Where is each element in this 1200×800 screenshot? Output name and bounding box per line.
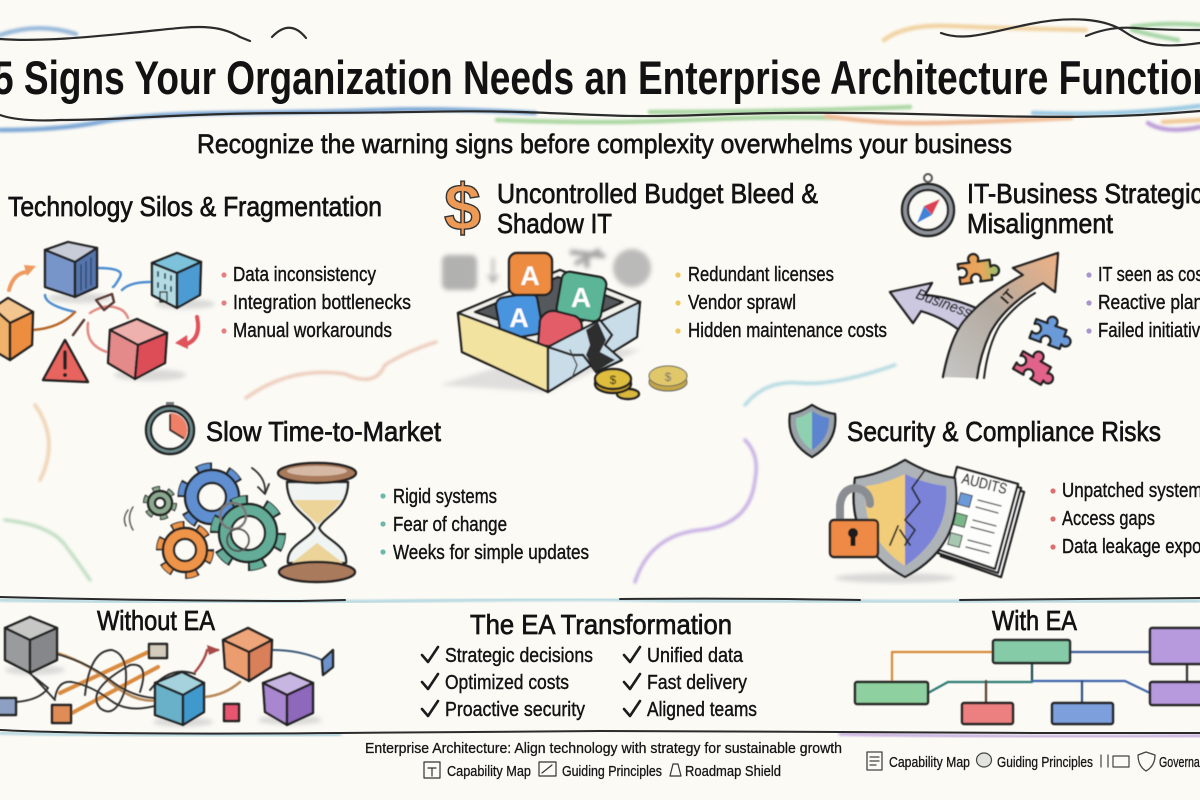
bullet list: security and compliance: Access gaps xyxy=(1062,508,1155,530)
orange gear xyxy=(161,526,209,574)
heading: with EA: With EA xyxy=(992,605,1077,636)
heading: slow time-to-market: Slow Time-to-Market xyxy=(206,416,441,447)
bullet list: technology silos: Data inconsistency xyxy=(233,264,376,286)
checklist: Proactive security xyxy=(445,699,585,721)
heading: strategic misalignment: Misalignment xyxy=(967,208,1113,239)
bullet list: slow time-to-market xyxy=(380,486,589,564)
bullet list: strategic misalignment xyxy=(1086,264,1200,342)
blue gear xyxy=(183,468,241,526)
icon: small shield xyxy=(789,405,835,457)
panel: budget bleed xyxy=(440,170,887,399)
icon: guiding principles globe xyxy=(976,753,992,767)
bullet list: slow time-to-market: Weeks for simple updates xyxy=(393,542,589,564)
illustration: tangled systems xyxy=(0,617,333,727)
checklist: Aligned teams xyxy=(647,699,757,721)
illustration: disconnected cubes xyxy=(0,242,215,382)
checklist xyxy=(422,645,757,721)
footer legend: center: Guiding Principles xyxy=(562,763,662,780)
bullet list: technology silos: Manual workarounds xyxy=(233,320,392,342)
panel: security and compliance xyxy=(789,405,1200,583)
icon: stopwatch xyxy=(146,402,194,454)
hourglass xyxy=(278,463,356,582)
checklist: Optimized costs xyxy=(445,672,569,694)
heading: budget bleed: Shadow IT xyxy=(497,208,612,239)
illustration: leaking box of apps: A xyxy=(571,282,591,313)
bullet list: technology silos xyxy=(221,264,411,342)
padlock xyxy=(830,488,878,557)
icon: capability map xyxy=(424,762,440,778)
illustration: leaking box of apps: $ xyxy=(665,370,672,384)
small gear xyxy=(147,490,173,516)
bullet list: budget bleed xyxy=(675,264,887,342)
comparison band borders xyxy=(0,597,1200,737)
footer legend: center xyxy=(424,762,781,780)
audit report: AUDITS xyxy=(960,470,1009,498)
audit report xyxy=(936,467,1024,577)
icon: roadmap marks xyxy=(1101,755,1129,767)
checklist: Unified data xyxy=(647,645,744,667)
icon: guiding principles xyxy=(539,762,556,776)
soft colour smears in the middle xyxy=(5,342,895,582)
subtitle: Recognize the warning signs before complexity overwhelms your business xyxy=(197,129,1012,159)
footer legend: right: Guiding Principles xyxy=(997,754,1093,771)
illustration: leaking box of apps: A xyxy=(509,303,529,333)
panel: without EA xyxy=(0,605,333,727)
heading: strategic misalignment xyxy=(967,178,1200,239)
icon: capability map document xyxy=(867,752,882,770)
footer tagline: Enterprise Architecture: Align technology with strategy for sustainable growth xyxy=(365,740,842,757)
illustration: diverging arrows and puzzle pieces: IT xyxy=(997,286,1019,308)
checklist: Strategic decisions xyxy=(445,645,593,667)
footer legend: center: Roadmap Shield xyxy=(685,763,781,780)
heading: budget bleed: Uncontrolled Budget Bleed & xyxy=(497,178,818,209)
checklist: Fast delivery xyxy=(647,672,747,694)
illustration: leaking box of apps: $ xyxy=(610,373,617,387)
heading: technology silos: Technology Silos & Fragmentation xyxy=(8,191,382,222)
panel: strategic misalignment xyxy=(890,174,1200,389)
teal gear xyxy=(216,501,280,565)
panel: technology silos xyxy=(0,191,411,382)
heading: security and compliance: Security & Compliance Risks xyxy=(847,416,1161,447)
footer legend: right xyxy=(867,752,1200,771)
illustration: leaking box of apps xyxy=(440,249,687,399)
bullet list: budget bleed: Redundant licenses xyxy=(688,264,834,286)
illustration: diverging arrows and puzzle pieces xyxy=(890,251,1077,389)
bullet list: budget bleed: Vendor sprawl xyxy=(688,292,796,314)
footer legend: right: Capability Map xyxy=(889,754,970,771)
icon: governance shield xyxy=(1138,752,1155,771)
footer legend: center: Capability Map xyxy=(447,763,531,780)
heading: EA transformation: The EA Transformation xyxy=(470,609,732,640)
illustration: diverging arrows and puzzle pieces: Business xyxy=(914,286,974,322)
illustration: gears and hourglass xyxy=(124,463,356,582)
icon: dollar sign: $ xyxy=(444,170,481,244)
heading: without EA: Without EA xyxy=(97,605,215,636)
bullet list: slow time-to-market: Fear of change xyxy=(393,514,507,536)
bullet list: budget bleed: Hidden maintenance costs xyxy=(688,320,887,342)
icon: compass xyxy=(902,174,954,236)
icon: roadmap xyxy=(670,764,681,776)
bullet list: slow time-to-market: Rigid systems xyxy=(393,486,497,508)
heading: budget bleed xyxy=(497,178,818,239)
panel: with EA xyxy=(855,605,1200,724)
decorative sketch strokes around the title xyxy=(0,19,1200,582)
illustration: leaking box of apps: A xyxy=(520,261,540,291)
big shield xyxy=(854,460,956,577)
bullet list: technology silos: Integration bottlenecks xyxy=(233,292,411,314)
panel: EA transformation xyxy=(422,609,757,721)
bullet list: security and compliance xyxy=(1050,480,1200,558)
diagram: organized architecture xyxy=(855,628,1200,724)
illustration: cracked shield, lock and audit report xyxy=(830,460,1024,583)
panel: slow time-to-market xyxy=(124,402,589,582)
